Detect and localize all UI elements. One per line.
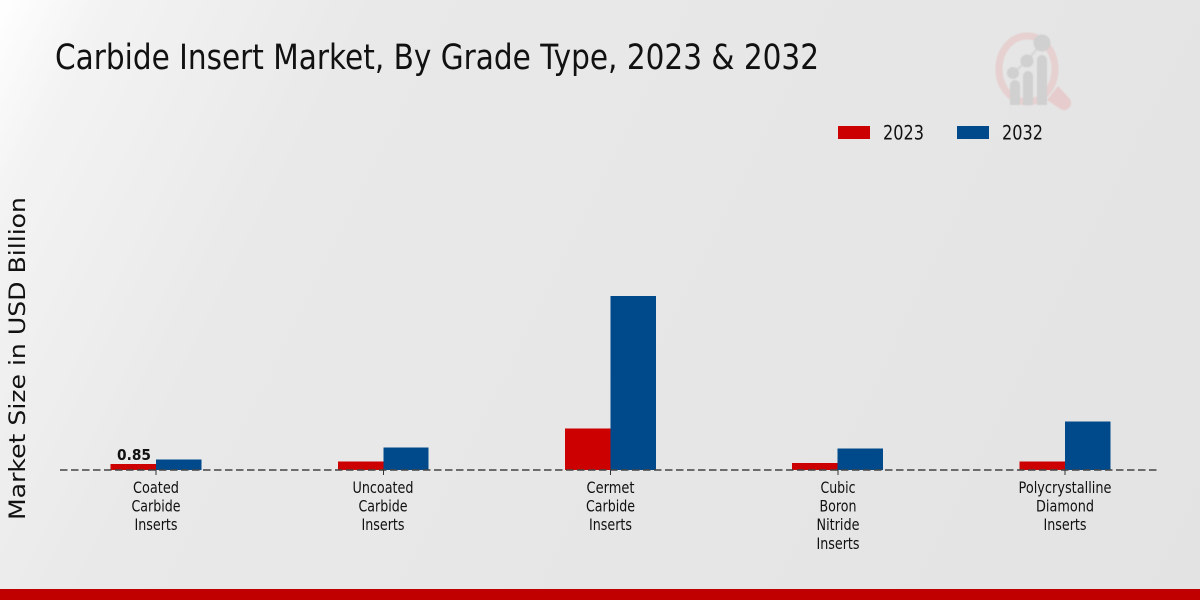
x label: Cubic Boron Nitride Inserts: Inserts bbox=[816, 534, 860, 553]
x label: Polycrystalline Diamond Inserts: Diamond bbox=[1036, 496, 1094, 516]
icon: watermark logo magnifier with bars bbox=[999, 34, 1071, 110]
value label 0.85: 0.85 bbox=[117, 446, 151, 464]
x label: Cermet Carbide Inserts: Cermet bbox=[586, 478, 634, 497]
title: Carbide Insert Market, By Grade Type, 2023 & 2032 bbox=[55, 38, 819, 78]
y axis title: Market Size in USD Billion bbox=[6, 197, 31, 520]
x label: Uncoated Carbide Inserts: Carbide bbox=[358, 496, 408, 516]
legend swatch 2032 bbox=[957, 126, 989, 139]
x label: Cubic Boron Nitride Inserts bbox=[816, 478, 860, 553]
x label: Coated Carbide Inserts: Carbide bbox=[132, 496, 181, 516]
x label: Cubic Boron Nitride Inserts: Boron bbox=[820, 496, 856, 516]
x label: Coated Carbide Inserts: Inserts bbox=[134, 515, 178, 534]
x label: Uncoated Carbide Inserts: Inserts bbox=[362, 515, 404, 534]
x label: Polycrystalline Diamond Inserts: Inserts bbox=[1044, 515, 1086, 534]
x label: Uncoated Carbide Inserts bbox=[352, 478, 414, 534]
group: Uncoated Carbide Inserts bbox=[338, 448, 428, 470]
x label: Cubic Boron Nitride Inserts: Cubic bbox=[820, 478, 856, 497]
x axis baseline bbox=[60, 469, 1160, 471]
x label: Cermet Carbide Inserts bbox=[586, 478, 635, 534]
bar chart bbox=[110, 296, 1110, 470]
x label: Coated Carbide Inserts: Coated bbox=[133, 478, 179, 497]
x label: Coated Carbide Inserts bbox=[132, 478, 181, 534]
group: Coated Carbide Inserts bbox=[110, 446, 202, 470]
legend swatch 2023 bbox=[838, 126, 870, 139]
x label: Uncoated Carbide Inserts: Uncoated bbox=[352, 478, 414, 497]
x label: Cermet Carbide Inserts: Carbide bbox=[586, 496, 635, 516]
legend label 2032: 2032 bbox=[1002, 122, 1043, 144]
group: Cubic Boron Nitride Inserts bbox=[792, 448, 883, 470]
x label: Polycrystalline Diamond Inserts bbox=[1018, 478, 1112, 534]
group: Polycrystalline Diamond Inserts bbox=[1020, 422, 1110, 470]
x label: Polycrystalline Diamond Inserts: Polycrystalline bbox=[1018, 478, 1112, 497]
x label: Cubic Boron Nitride Inserts: Nitride bbox=[816, 515, 860, 534]
footer bar bbox=[0, 589, 1200, 600]
x label: Cermet Carbide Inserts: Inserts bbox=[589, 515, 632, 534]
group: Cermet Carbide Inserts bbox=[565, 296, 656, 470]
legend label 2023: 2023 bbox=[883, 122, 924, 144]
legend bbox=[838, 122, 1043, 144]
